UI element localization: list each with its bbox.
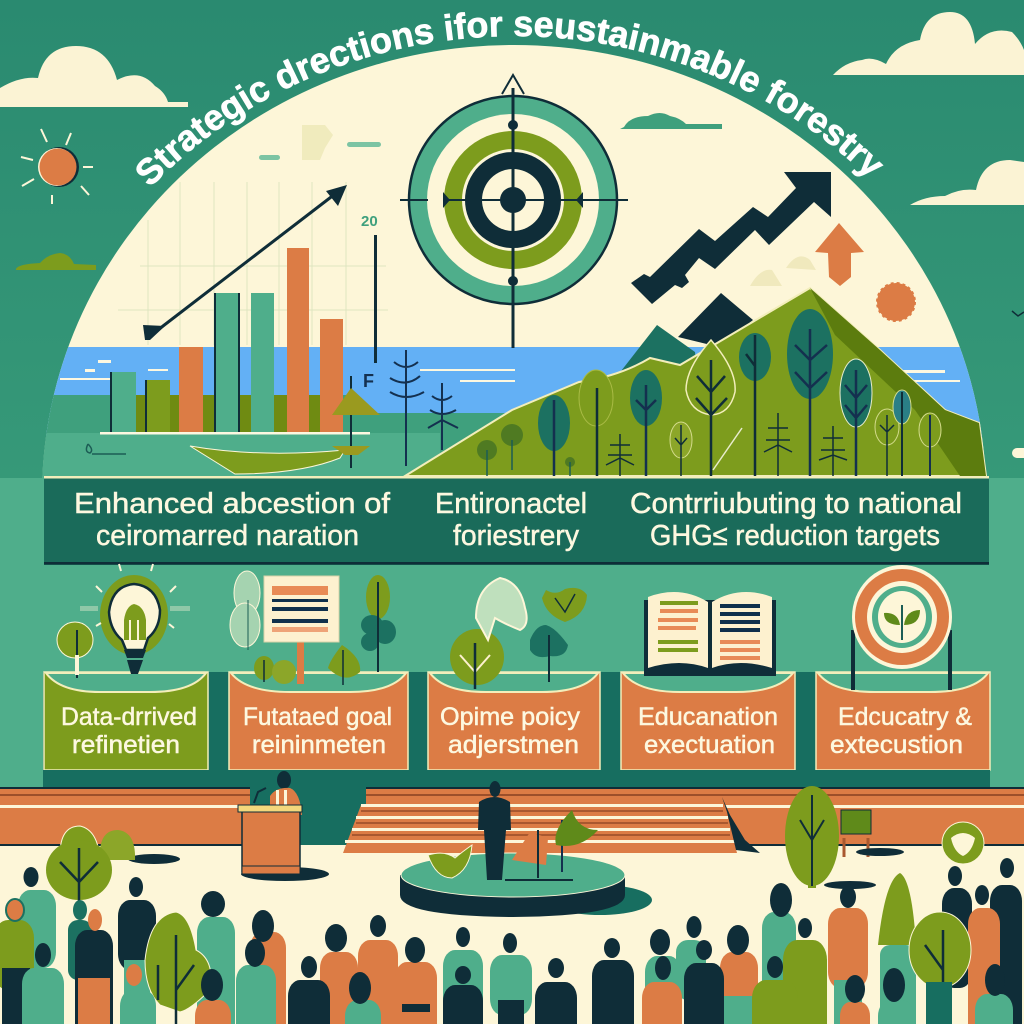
person [395,937,437,1024]
tree: crowd left [145,912,211,1024]
crowd [0,858,1022,1024]
icon: sun [21,129,93,204]
person [197,891,235,1024]
icon: policy trees [450,578,587,689]
person [990,858,1022,1024]
target [400,75,628,348]
title [150,36,900,212]
person [443,927,483,1024]
tree: left [46,826,180,905]
person [358,915,398,1024]
person [828,886,868,1024]
cloud: small green in dome [620,113,722,129]
icon: sign with plants [230,571,396,685]
icon: open book [644,592,776,676]
dark block behind hills [678,293,753,347]
cone tree [878,873,916,945]
box: education and execution [816,672,990,770]
arrow: zigzag growth [631,172,831,304]
small boat tree [332,376,380,468]
box: data-driven refinement: refinetien [72,731,180,759]
person [120,964,156,1024]
person [535,958,577,1024]
person [752,956,798,1024]
person [75,909,113,1024]
ground [0,845,1024,1024]
wall: right [366,787,1024,846]
speaker [254,771,302,815]
person [720,925,758,1024]
box: future goal refinement [229,672,408,770]
arrow: orange up [815,223,864,286]
banner [44,476,989,565]
banner text: right: GHG≤ reduction targets [650,520,940,552]
pill [1012,448,1024,458]
banner text: left: Enhanced abcestion of [74,488,391,520]
box: education execution: Educanation [638,703,778,731]
person [840,975,870,1024]
lower panel background [0,478,1024,790]
box: policy adjustment [428,672,600,770]
person [195,969,231,1024]
person [320,924,358,1024]
forest trees [477,309,941,476]
box: policy adjustment: adjerstmen [448,731,579,759]
faint hills [750,256,816,286]
pine trees [390,350,458,466]
person [645,929,681,1024]
person [968,885,1000,1024]
box: education and execution: extecustion [830,731,963,759]
tree: right [785,786,876,889]
teal wall behind boxes [43,672,990,792]
box: future goal refinement: reininmeten [252,731,386,759]
bar chart [100,182,388,434]
bird [1012,311,1024,316]
banner text: right [630,488,962,552]
stage man [478,781,511,880]
banner text: middle: Entironactel [435,488,587,520]
person [118,877,156,1024]
hills [405,288,986,476]
icon: light bulb [80,564,190,674]
person [22,943,64,1024]
person [878,968,914,1024]
dome panel [40,45,990,495]
person [345,972,381,1024]
sea [40,347,990,437]
box: future goal refinement: Futataed goal [243,703,392,731]
box: education and execution: Edcucatry & [838,703,972,731]
box: education execution [621,672,795,770]
person [684,940,724,1024]
person [942,866,972,988]
person [68,900,92,980]
person [490,933,532,1024]
cloud: mid right [910,160,1024,205]
person [0,899,34,1024]
banner text: middle: foriestrery [453,520,579,552]
person [18,867,56,968]
box: data-driven refinement: Data-drrived [61,703,197,731]
box: data-driven refinement [44,672,208,770]
banner text: left [74,488,391,552]
person [676,916,706,1000]
person [592,938,634,1024]
icon: orange starburst [877,283,915,321]
person [762,883,796,1024]
chart label: 20: 20 [361,213,378,230]
tree: crowd right [909,912,971,1024]
person [250,910,286,1024]
banner text: right: Contrriubuting to national [630,488,962,520]
person [642,956,682,1024]
stairs [343,797,760,853]
cloud: small olive [16,253,96,270]
text: Strategic drections ifor seustainmable forestry [136,12,884,184]
banner text: left: ceiromarred naration [96,520,359,552]
podium [238,805,329,881]
left land [40,395,350,480]
person [975,964,1013,1024]
teal stage backdrop [43,770,990,845]
squiggle mark [86,444,126,454]
icon: sprout badge [852,565,952,690]
chart grid [118,182,388,345]
person [880,945,916,1024]
icon: small tree [57,622,93,678]
vertical marker [374,235,377,363]
person [783,918,827,1024]
stage plant sculpture [428,810,598,880]
bench [841,810,904,857]
icon: badge on wall [942,822,984,864]
person [236,939,276,1024]
platform [400,853,652,917]
cloud: top left [0,46,188,107]
chart label: F: F [363,371,374,391]
faint decorative marks [259,125,381,160]
cloud: top right [833,12,1024,75]
wall: left [0,787,250,846]
person [443,966,483,1024]
person [288,956,330,1024]
box: policy adjustment: Opime poicy [440,703,580,731]
box: education execution: exectuation [644,731,775,759]
banner text: middle [435,488,587,552]
arrow: trend line [143,185,347,340]
